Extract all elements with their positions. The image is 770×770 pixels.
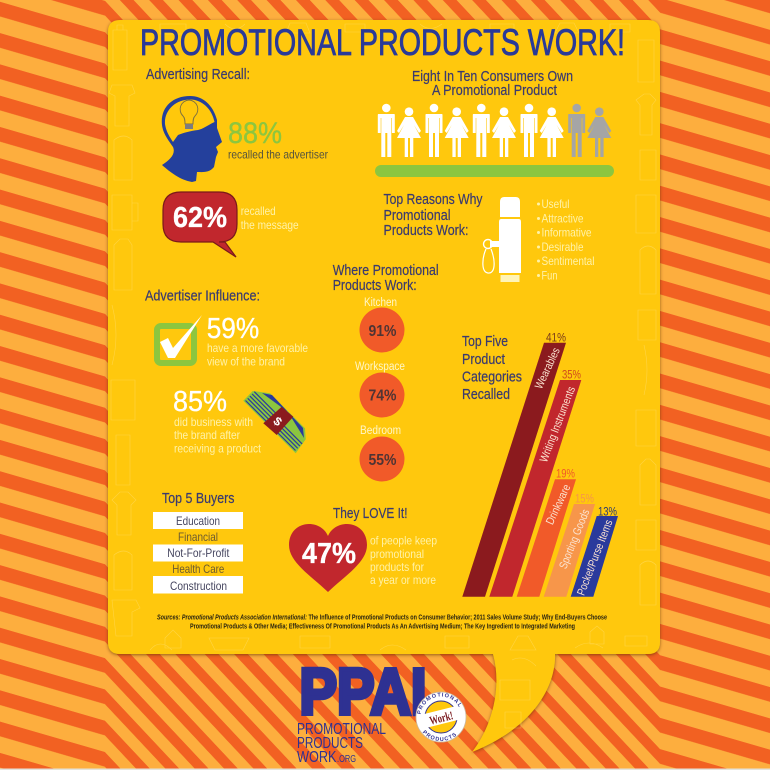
tagline: promotional products work.org: .ORG [337, 754, 356, 765]
bar: sporting goods: Sporting Goods [558, 508, 592, 571]
chart heading [462, 334, 522, 403]
caption: favorable view [207, 341, 308, 368]
caption: keep products: a year or more [370, 573, 436, 587]
badge: promotional products work: PRODUCTS [422, 730, 456, 742]
section: advertiser influence [145, 289, 308, 456]
chart: top five product categories [462, 333, 618, 597]
speech bubble: 62% [163, 192, 237, 257]
green base bar [375, 165, 614, 177]
heading: top reasons: Promotional [384, 208, 450, 224]
circle: 74%: 74% [368, 388, 396, 404]
speech bubble panel [108, 20, 660, 752]
chart heading: Top Five [462, 334, 508, 350]
bar: sporting goods [544, 493, 595, 597]
circle: 55%: 55% [368, 452, 396, 469]
stat: 59%: 59% [207, 313, 259, 345]
sources text [157, 614, 607, 630]
heading: eight in ten: Eight In Ten Consumers Own [412, 69, 573, 85]
heading: top 5 buyers: Top 5 Buyers [162, 491, 234, 507]
stat: 88%: 88% [228, 117, 282, 150]
heading: where promotional products work: Products Work: [333, 278, 417, 294]
badge: promotional products work [416, 692, 466, 742]
chart heading: Recalled [462, 387, 510, 403]
caption: keep products: products for [370, 560, 424, 574]
label: bedroom: Bedroom [360, 425, 401, 437]
icon: banded money roll [243, 391, 306, 453]
heading: eight in ten [412, 69, 573, 99]
circle: 91% [360, 308, 404, 352]
bar: sporting goods: 15% [575, 493, 594, 505]
list of reasons: Attractive [542, 212, 584, 226]
label: workspace: Workspace [355, 361, 405, 373]
badge: promotional products work: Work! [428, 708, 455, 728]
caption: did business: did business with [174, 415, 253, 429]
sources text: Promotional Products & Other Media; Effectiveness Of Promotional Products As An Advertising Medium; The Key Ingredient to Integrated Marketing [190, 624, 575, 630]
row: health care: Health Care [172, 562, 225, 576]
tagline: promotional products work.org: WORK [297, 749, 337, 766]
list of reasons: Useful [542, 197, 570, 211]
caption: favorable view: view of the brand [207, 354, 285, 368]
section: they love it [289, 506, 437, 592]
caption: keep products [370, 534, 437, 587]
icon: white flask [483, 197, 521, 282]
bar: writing instruments [489, 369, 581, 597]
chart heading: Categories [462, 370, 522, 386]
label: kitchen: Kitchen [364, 297, 397, 309]
heading: advertiser influence: Advertiser Influence: [145, 289, 260, 305]
logo: PPAI [297, 655, 466, 766]
title: PROMOTIONAL PRODUCTS WORK! [140, 21, 625, 63]
section: advertising recall [146, 67, 328, 257]
section: top five buyers [153, 491, 243, 594]
caption: recalled the message [241, 204, 299, 232]
row: not-for-profit: Not-For-Profit [167, 546, 230, 560]
bar: writing instruments: 35% [562, 369, 581, 381]
caption: recalled the advertiser: recalled the advertiser [228, 148, 328, 162]
pictogram: ten people [378, 104, 611, 157]
promotional item outline watermark [109, 23, 656, 728]
icon: head with light bulb [162, 96, 222, 182]
bar: wearables: 41% [546, 333, 566, 345]
caption: keep products: promotional [370, 547, 424, 561]
heading: top reasons: Top Reasons Why [384, 192, 483, 208]
caption: recalled the message: recalled [241, 204, 276, 218]
tagline: promotional products work.org [297, 721, 386, 766]
tagline: promotional products work.org: PRODUCTS [297, 735, 363, 752]
bar: drinkware [517, 469, 576, 597]
bar: pocket/purse items: Pocket/Purse Items [576, 518, 616, 597]
heading: advertising recall: Advertising Recall: [146, 67, 250, 83]
stat: 85%: 85% [173, 386, 227, 418]
chart heading: Product [462, 352, 505, 368]
heading: they love it: They LOVE It! [333, 506, 408, 522]
section: top reasons [384, 192, 594, 282]
heart: 47% [289, 524, 367, 592]
speech bubble: 62%: 62% [173, 202, 227, 234]
caption: did business [174, 415, 262, 456]
list of reasons: Informative [542, 226, 592, 240]
caption: recalled the message: the message [241, 218, 299, 232]
badge: promotional products work: PROMOTIONAL [416, 692, 462, 714]
bar: pocket/purse items: 13% [598, 506, 617, 518]
heading: where promotional products work: Where Promotional [333, 263, 439, 279]
circle: 91%: 91% [368, 323, 396, 340]
icon: green check box [157, 315, 202, 363]
bar: drinkware: 19% [556, 469, 575, 481]
row: financial: Financial [178, 530, 218, 544]
wordmark: PPAI [300, 655, 426, 728]
bar: writing instruments: Writing Instruments [538, 385, 578, 464]
heading: where promotional products work [333, 263, 439, 294]
list of reasons: Desirable [542, 240, 584, 254]
bar: wearables [462, 333, 566, 597]
row: construction: Construction [170, 579, 227, 593]
bar: drinkware: Drinkware [544, 483, 573, 527]
caption: keep products: of people keep [370, 534, 437, 548]
caption: did business: receiving a product [174, 442, 262, 456]
heart: 47%: 47% [302, 538, 356, 570]
bar: wearables: Wearables [533, 346, 563, 391]
heading: top reasons: Products Work: [384, 223, 468, 239]
section: where products work [333, 263, 439, 482]
sources text: Sources: Promotional Products Association International: The Influence of Promotional Products on Consumer Behavior; 2011 Sales Volume Study; Why End-Buyers Choose [157, 614, 607, 622]
icon: banded money roll: $ [270, 414, 285, 429]
heading: eight in ten: A Promotional Product [432, 83, 557, 99]
list of reasons: Sentimental [542, 254, 594, 268]
tagline: promotional products work.org: PROMOTIONAL [297, 721, 386, 738]
circle: 55% [360, 436, 404, 482]
circle: 74% [360, 372, 404, 418]
caption: did business: the brand after [174, 428, 240, 442]
row: education: Education [176, 514, 220, 528]
list of reasons [537, 197, 594, 282]
list of reasons: Fun [542, 268, 558, 282]
heading: top reasons [384, 192, 483, 239]
caption: favorable view: have a more favorable [207, 341, 308, 355]
section: eight in ten consumers [375, 69, 614, 177]
